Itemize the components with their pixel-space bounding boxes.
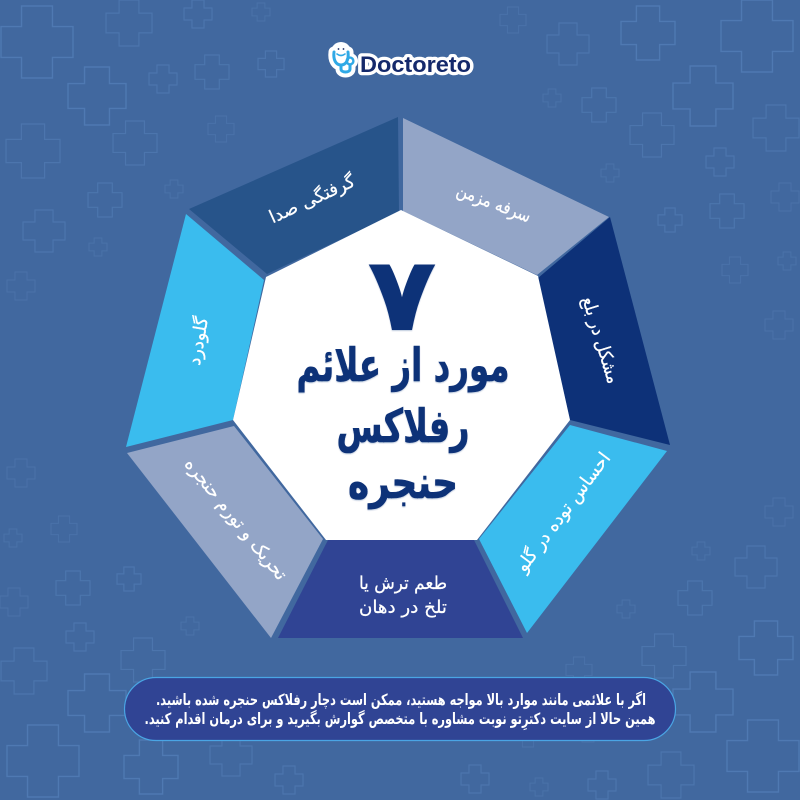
title: حنجره: [348, 455, 458, 509]
title: [296, 235, 510, 509]
segment: hoarseness: گرفتگی صدا: [266, 170, 359, 228]
title: مورد از علائم: [296, 338, 510, 392]
segment: irritation and swelling of larynx: [127, 426, 323, 638]
title: ۷: [367, 235, 437, 355]
segment: chronic cough: سرفه مزمن: [454, 180, 534, 227]
segment: irritation and swelling of larynx: تحریک و تورم حنجره: [180, 454, 291, 585]
title: رفلاکس: [336, 399, 470, 453]
segment: sour or bitter taste: طعم ترش یا: [359, 573, 447, 594]
segment: sore throat: [126, 214, 264, 447]
segment: lump in throat: احساس توده در گلو: [510, 448, 615, 577]
segment: lump in throat: [479, 425, 667, 633]
segment: difficulty swallowing: [538, 217, 670, 445]
logo: Doctoreto: [331, 42, 471, 77]
center panel: [233, 210, 570, 540]
segment: hoarseness: [189, 117, 399, 274]
segment: difficulty swallowing: مشکل در بلع: [577, 294, 624, 386]
segment: sour or bitter taste: تلخ در دهان: [359, 597, 447, 618]
segment: sour or bitter taste: [278, 540, 523, 638]
segment: sore throat: گلودرد: [183, 315, 213, 367]
icon: stethoscope: [331, 42, 356, 72]
logo wordmark: Doctoreto: [360, 52, 471, 77]
heptagon diagram: [126, 117, 670, 638]
callout: [124, 678, 676, 740]
segment: chronic cough: [403, 118, 609, 275]
